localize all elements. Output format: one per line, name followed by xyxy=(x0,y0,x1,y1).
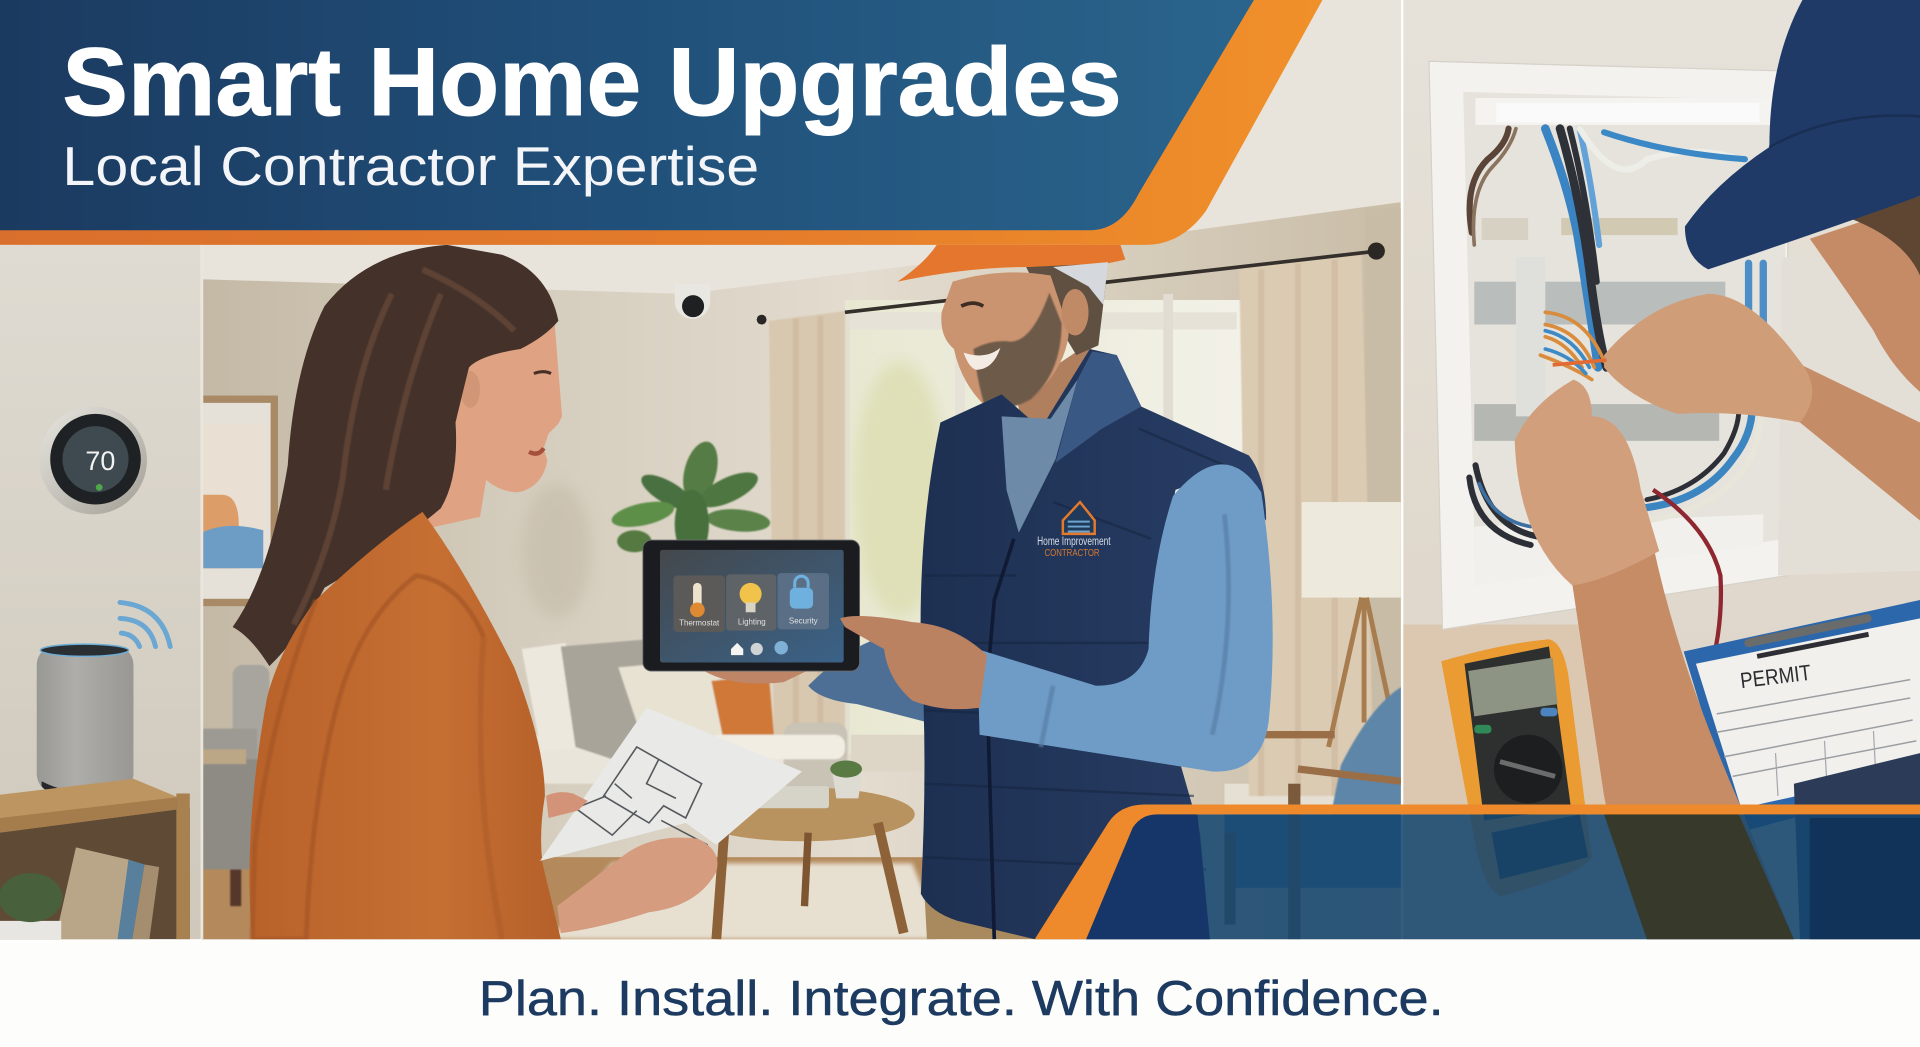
armchair blue xyxy=(1224,686,1403,939)
blueprint sheet xyxy=(540,708,802,861)
cap xyxy=(1685,0,1920,269)
sofa xyxy=(522,639,848,788)
open panel door xyxy=(1778,257,1920,576)
hand on paper and forearm xyxy=(546,792,718,933)
logo on vest: Home Improvement xyxy=(1037,535,1111,548)
bottom icons xyxy=(731,643,743,655)
red and black meter lead xyxy=(1653,490,1721,698)
face xyxy=(941,272,1069,407)
vest xyxy=(921,349,1266,939)
smile and eye xyxy=(529,448,544,454)
ear xyxy=(460,371,480,408)
title: Smart Home Upgrades xyxy=(62,28,1122,136)
tile: lighting xyxy=(726,574,776,631)
person: contractor man xyxy=(704,245,1273,939)
armchair xyxy=(202,665,276,906)
torso shirt xyxy=(1794,753,1920,939)
icon: wifi signal arcs xyxy=(120,602,170,647)
multimeter xyxy=(1441,639,1592,896)
shirt collar and placket xyxy=(1002,380,1078,533)
person: homeowner woman xyxy=(233,245,562,939)
permit clipboard: PERMIT xyxy=(1739,660,1812,693)
orange banner backing xyxy=(0,0,1322,245)
hand holding wire xyxy=(1604,294,1812,422)
trousers xyxy=(924,900,1040,940)
tile: security: Security xyxy=(789,616,818,625)
sweater xyxy=(249,512,561,939)
neck xyxy=(1018,348,1091,419)
permit clipboard xyxy=(1684,600,1920,833)
logo on vest xyxy=(1037,502,1111,559)
zipper xyxy=(987,539,1014,939)
second hand xyxy=(1515,380,1659,585)
wood shelf with books and plant xyxy=(0,779,190,939)
icon: smart thermostat xyxy=(39,407,147,514)
panel: left wall with devices xyxy=(0,245,201,939)
wall xyxy=(1403,0,1920,939)
tile: security xyxy=(778,573,829,629)
framed wall art xyxy=(202,396,278,606)
plant xyxy=(609,438,771,558)
room background xyxy=(202,0,1402,943)
panel: right electrician scene xyxy=(1403,0,1920,943)
tile: thermostat: Thermostat xyxy=(679,619,720,628)
electrician face and hair xyxy=(1810,196,1920,392)
tablet xyxy=(643,540,860,671)
panel: center living room scene xyxy=(202,0,1406,943)
logo on vest: CONTRACTOR xyxy=(1044,548,1100,559)
orange accent bracket xyxy=(1035,805,1920,939)
divider strip xyxy=(201,245,203,939)
vest collar xyxy=(1056,351,1141,463)
overlay shirt navy xyxy=(1810,818,1920,939)
vest under overlay xyxy=(1086,814,1210,939)
shirt arm xyxy=(977,464,1273,772)
header banner xyxy=(0,0,1322,245)
plant shadow on wall xyxy=(526,488,590,614)
electrician arm lower xyxy=(1571,545,1794,939)
tagline: Plan. Install. Integrate. With Confidence. xyxy=(479,972,1444,1026)
smile xyxy=(964,348,1000,370)
window xyxy=(840,294,1243,771)
icon: smart thermostat: 70 xyxy=(85,446,115,476)
security camera xyxy=(674,290,710,319)
beard xyxy=(973,293,1062,408)
pointing hand xyxy=(840,616,987,709)
shaded forearm band xyxy=(1604,814,1794,939)
smart speaker xyxy=(37,644,133,796)
bottom tinted overlay xyxy=(1086,814,1920,939)
curtains and rod xyxy=(757,242,1385,796)
eye xyxy=(961,303,983,306)
far arm and sleeve xyxy=(808,641,924,722)
upper arm xyxy=(1763,361,1920,520)
face and neck xyxy=(428,325,562,527)
hand under tablet xyxy=(705,672,806,684)
subtitle: Local Contractor Expertise xyxy=(62,135,759,197)
hair xyxy=(233,245,558,666)
wiring bundles xyxy=(1469,129,1763,545)
wall xyxy=(0,245,201,939)
coffee table xyxy=(689,760,915,939)
wire strand xyxy=(1553,360,1607,365)
hard hat xyxy=(898,245,1125,282)
quilting xyxy=(924,429,1224,869)
tile: lighting: Lighting xyxy=(738,618,766,627)
tile: thermostat xyxy=(673,576,725,632)
ear xyxy=(1062,289,1089,336)
floor lamp xyxy=(1302,502,1406,747)
blue banner xyxy=(0,0,1254,230)
electrical panel frame xyxy=(1429,61,1788,629)
hair xyxy=(1022,260,1106,355)
